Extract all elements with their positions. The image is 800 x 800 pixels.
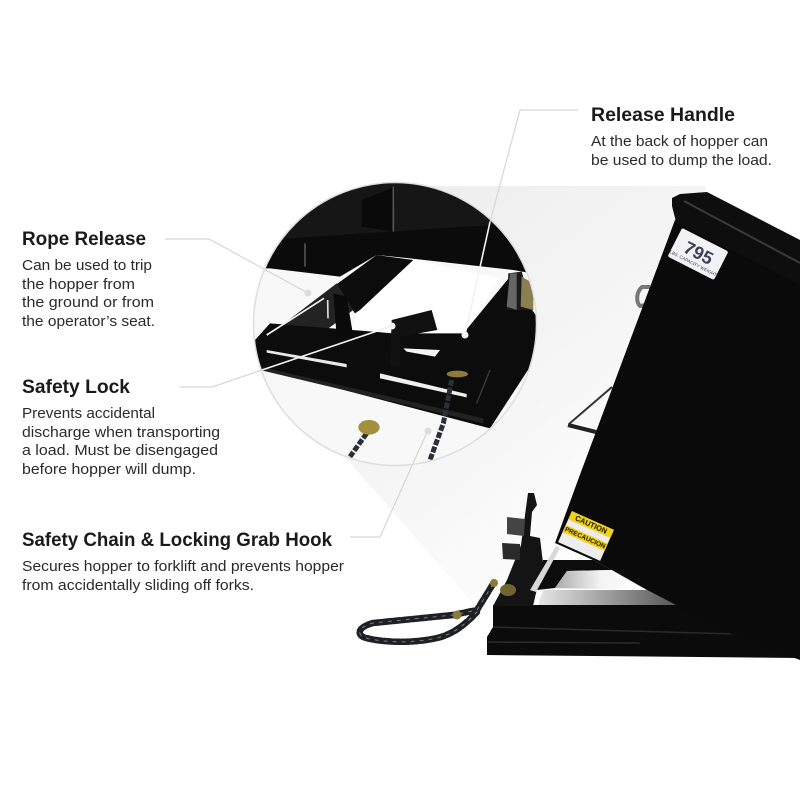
under-body wedge and gray plate	[537, 560, 612, 590]
text block: safety lock: discharge when transporting	[22, 425, 220, 441]
safety chain	[360, 579, 516, 642]
text block: rope release: the ground or from	[22, 295, 154, 311]
text block: safety chain	[22, 529, 344, 594]
loose chain	[350, 433, 367, 457]
capacity label 795	[667, 228, 729, 280]
text block: release handle: Release Handle	[591, 104, 735, 126]
hopper side hook	[637, 287, 650, 306]
caution label: PRECAUCION	[564, 526, 607, 550]
text block: safety lock: Prevents accidental	[22, 406, 155, 422]
callout line: safety lock	[180, 322, 396, 387]
text block: rope release: the hopper from	[22, 277, 135, 293]
diagonal plate	[333, 255, 413, 313]
main frame	[255, 277, 537, 428]
inner chain	[430, 380, 452, 460]
callout line: release handle	[462, 110, 578, 338]
callout line: rope release	[165, 239, 312, 296]
capacity label 795: LBS. CAPACITY WEIGHT	[669, 249, 718, 278]
caution label: CAUTION	[574, 514, 609, 536]
text block: release handle: be used to dump the load.	[591, 153, 772, 169]
inset circle detail view	[255, 183, 536, 460]
background spotlight cone	[300, 186, 705, 600]
hopper rim	[672, 192, 800, 285]
frame slots	[267, 350, 347, 367]
text block: safety chain: Safety Chain & Locking Grab Hook	[22, 529, 332, 551]
text block: safety lock: a load. Must be disengaged	[22, 443, 218, 459]
text block: safety lock: before hopper will dump.	[22, 462, 196, 478]
circle outline	[254, 182, 536, 466]
text block: release handle	[591, 104, 772, 169]
hopper latch	[569, 387, 612, 424]
base plate	[487, 605, 800, 658]
text block: rope release: Rope Release	[22, 228, 146, 250]
text block: rope release: the operator’s seat.	[22, 314, 155, 330]
text block: rope release: Can be used to trip	[22, 258, 152, 274]
caution label	[558, 511, 614, 561]
hopper underside	[266, 183, 526, 277]
text block: rope release	[22, 228, 155, 330]
frame bracket uprights	[334, 294, 352, 330]
capacity label 795: 795	[681, 237, 716, 269]
white rope	[267, 298, 324, 335]
white rectangle floor	[350, 260, 500, 335]
text block: safety chain: Secures hopper to forklift and prevents hopper	[22, 559, 344, 575]
text block: safety lock: Safety Lock	[22, 376, 130, 398]
text block: safety lock	[22, 376, 220, 478]
callout line: safety chain	[350, 428, 432, 537]
text block: release handle: At the back of hopper can	[591, 134, 768, 150]
hopper body	[555, 220, 800, 660]
text block: safety chain: from accidentally sliding off forks.	[22, 578, 254, 594]
front bracket	[493, 493, 560, 606]
hopper product photo	[360, 192, 800, 660]
